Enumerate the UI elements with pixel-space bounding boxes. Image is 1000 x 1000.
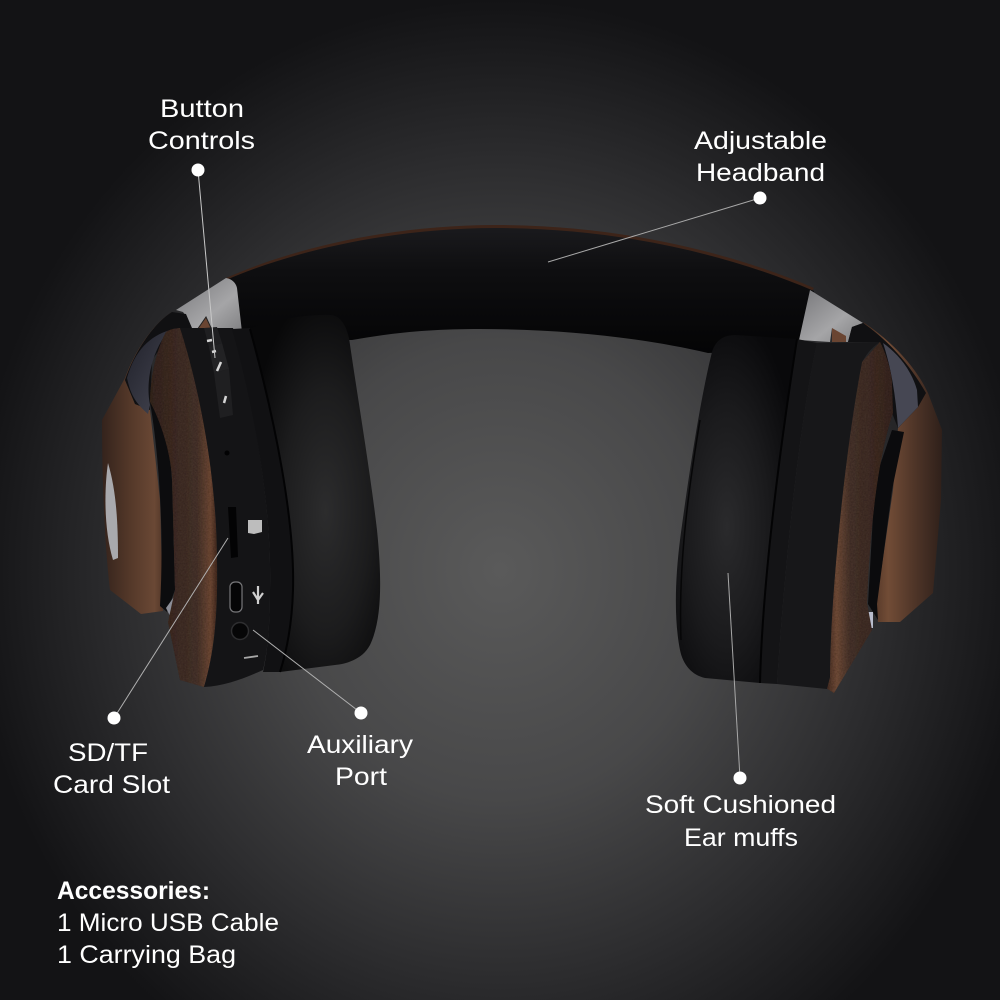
accessories text block: Accessories: [57,877,210,905]
USB icon [253,586,263,604]
headphones [102,225,942,693]
left black ring [180,328,270,687]
label: SD/TF card slot: SD/TF [68,739,148,767]
label: adjustable headband [694,127,827,187]
accessories text block [57,877,279,969]
label: adjustable headband: Headband [696,159,825,187]
SD icon [248,520,262,534]
label: button controls: Controls [148,127,255,155]
left brown disc [150,328,217,687]
leader line: adjustable headband [548,192,766,262]
right pad seam [760,339,797,683]
label: auxiliary port [307,731,414,791]
accessories text block: 1 Micro USB Cable [57,909,279,937]
label: SD/TF card slot [53,739,170,799]
right cushion strip [760,339,817,684]
label: auxiliary port: Auxiliary [307,731,414,759]
label: button controls [148,95,255,155]
left pad seam [250,329,293,672]
left gasket [150,402,175,612]
right brown disc [826,342,893,693]
right black ring [777,342,880,689]
left arm and inner band [125,312,192,410]
SD card slot [228,507,238,558]
mic hole [224,450,230,456]
micro USB port [230,582,242,612]
headband [226,225,814,353]
left ear pad [250,315,380,672]
left cushion strip [232,328,293,672]
label: soft cushioned ear muffs: Ear muffs [684,824,798,852]
label: soft cushioned ear muffs [645,791,836,852]
label: adjustable headband: Adjustable [694,127,827,155]
accessories text block: 1 Carrying Bag [57,941,236,969]
label: soft cushioned ear muffs: Soft Cushioned [645,791,836,819]
leader line: auxiliary port [253,630,368,720]
right gasket [868,430,904,620]
leader line: ear muffs [728,573,746,784]
label: SD/TF card slot: Card Slot [53,771,170,799]
label: auxiliary port: Port [335,763,387,791]
left silver slider [176,278,242,332]
right silver slider [799,290,863,342]
label: button controls: Button [160,95,244,123]
left outer shell [102,312,172,614]
right ear cup [676,322,942,693]
left ear cup [102,312,380,687]
right ear pad [676,335,797,683]
right arm and inner band [848,323,926,428]
auxiliary jack [232,622,248,640]
left silver hub [105,463,118,560]
mic icon [244,656,258,658]
leader line: button controls [192,164,215,358]
button panel [204,327,233,418]
leader line: SD card slot [108,538,228,724]
right outer shell [863,322,942,622]
